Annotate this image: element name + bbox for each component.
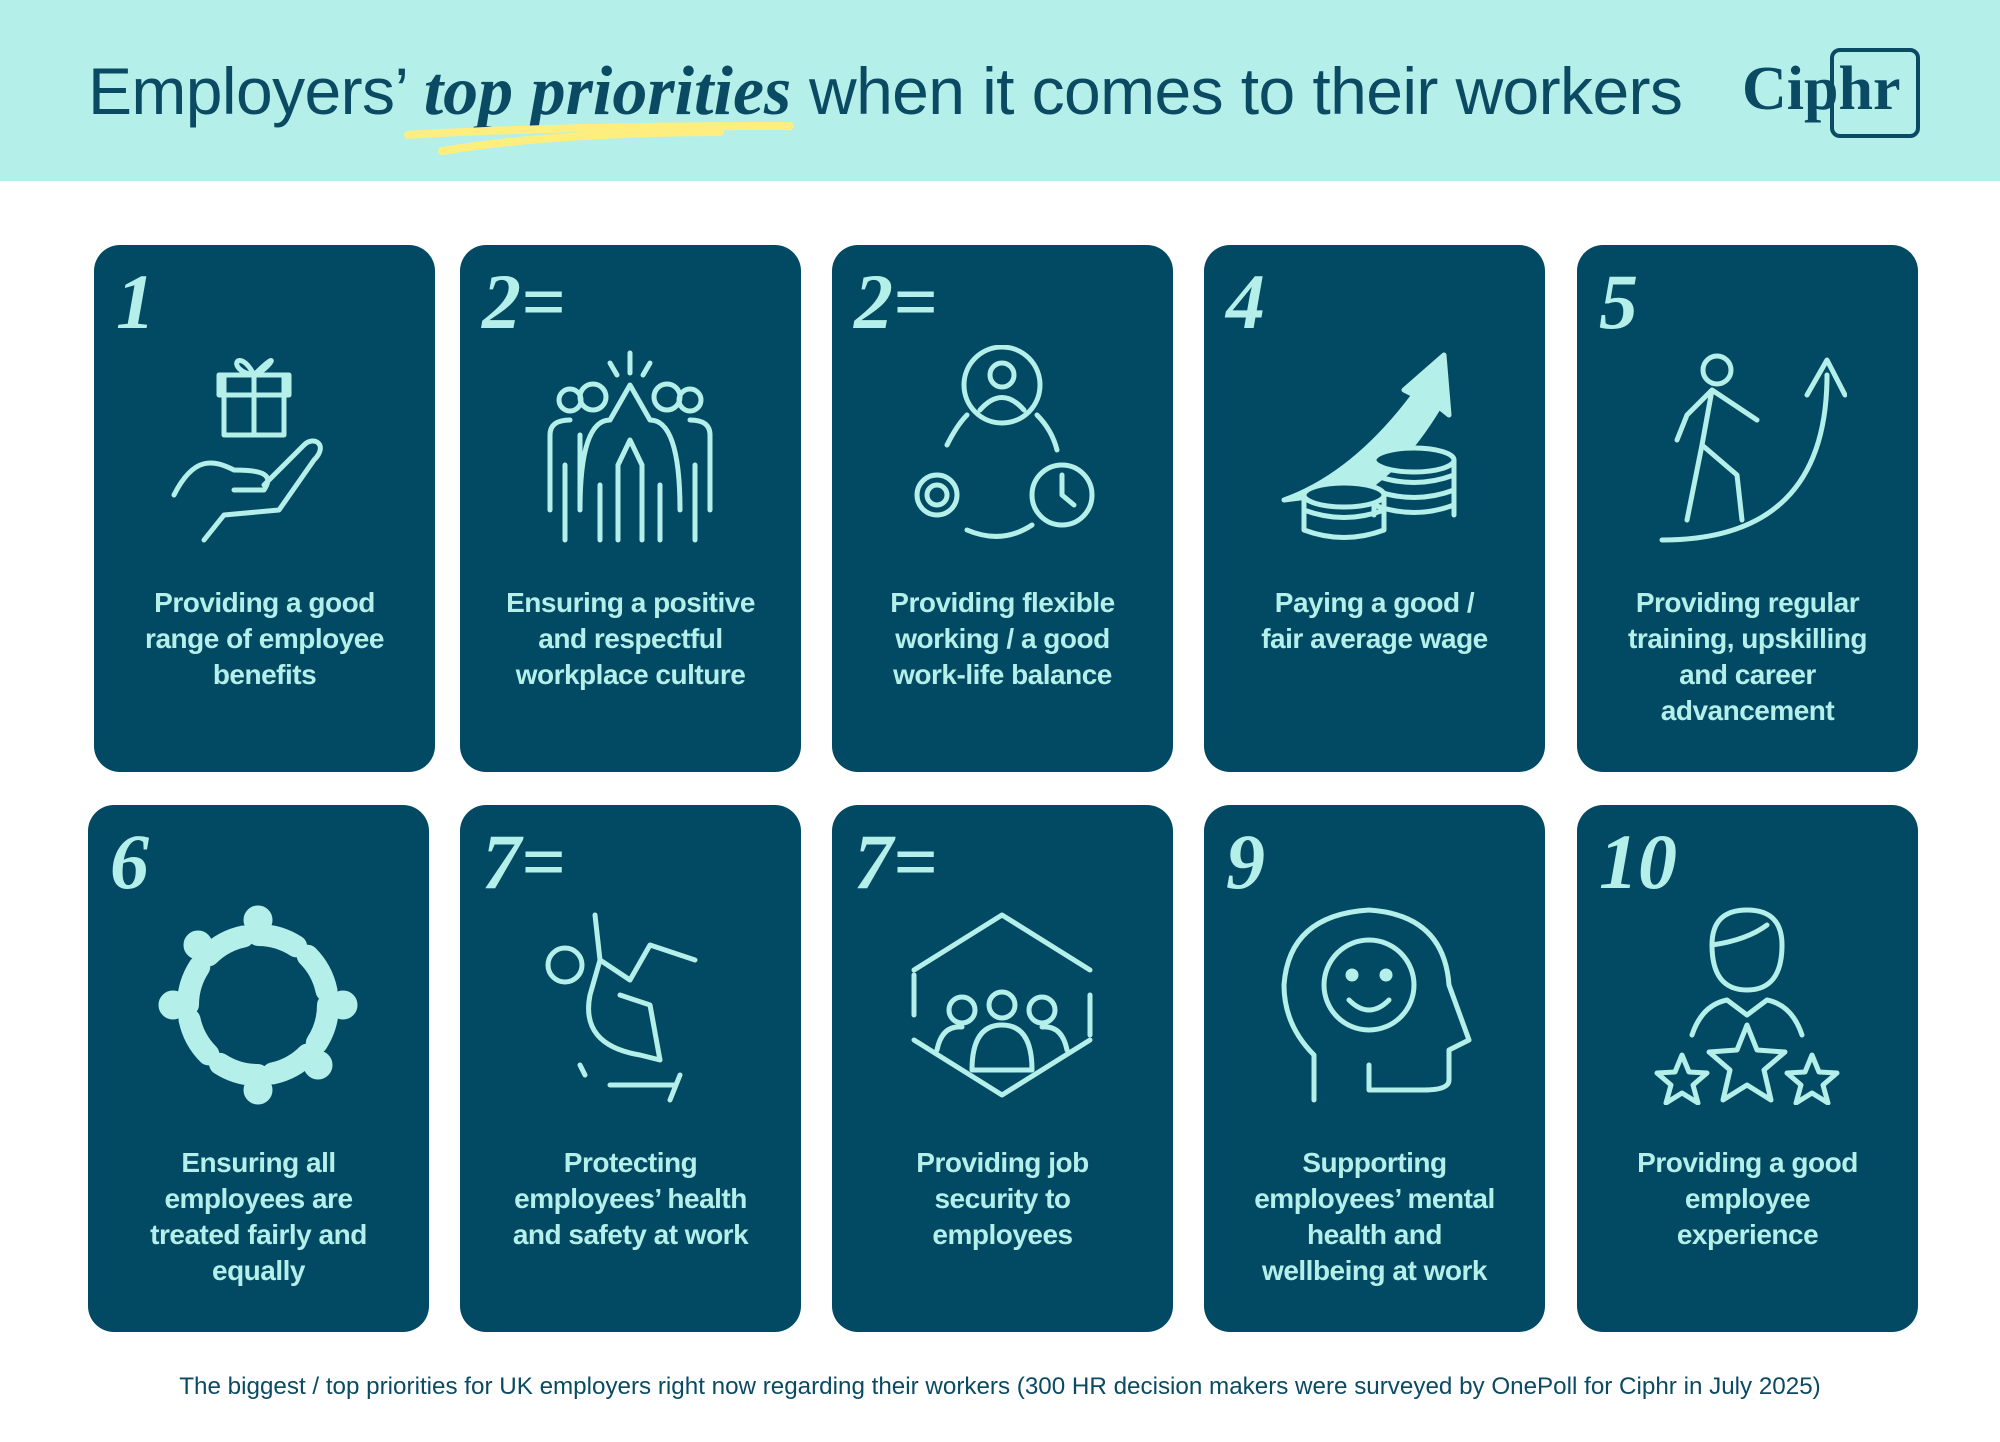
card 4: Paying a good / [1275, 587, 1474, 618]
card 5: and career [1679, 659, 1816, 690]
card 2: 2= [482, 258, 565, 345]
card 5: 5 [1599, 258, 1638, 345]
card 10: 10 [1599, 818, 1677, 905]
title: Employers’ top priorities when it comes to their workers [88, 53, 1682, 130]
card 8: employees [932, 1219, 1073, 1250]
card 6: 6 [110, 818, 149, 905]
icon: head with smile [1282, 908, 1472, 1102]
card 7 [460, 805, 801, 1332]
card 3: work-life balance [893, 659, 1112, 690]
card 5: training, upskilling [1628, 623, 1867, 654]
card 9 [1204, 805, 1545, 1332]
card 6 [88, 805, 429, 1332]
card 3: 2= [854, 258, 937, 345]
card 5: advancement [1661, 695, 1834, 726]
header band [0, 0, 2000, 181]
card 3: Providing flexible [890, 587, 1115, 618]
card 8 [832, 805, 1173, 1332]
card 9: 9 [1226, 818, 1265, 905]
card 7: Protecting [564, 1147, 697, 1178]
icon: coins and arrow [1282, 352, 1456, 540]
card 5 [1577, 245, 1918, 772]
card 1: Providing a good [154, 587, 375, 618]
card 3 [832, 245, 1173, 772]
icon: gift in hand [172, 358, 323, 542]
card 6: treated fairly and [150, 1219, 367, 1250]
card 9: Supporting [1302, 1147, 1447, 1178]
card 10: Providing a good [1637, 1147, 1858, 1178]
card 2: and respectful [538, 623, 723, 654]
icon: team high five [548, 350, 712, 542]
card 3: working / a good [895, 623, 1110, 654]
card 9: health and [1307, 1219, 1442, 1250]
card 4: 4 [1226, 258, 1265, 345]
card 1: 1 [116, 258, 155, 345]
icon: person falling [546, 912, 698, 1102]
card 1 [94, 245, 435, 772]
card 9: wellbeing at work [1262, 1255, 1487, 1286]
card 7: employees’ health [514, 1183, 747, 1214]
card 2: workplace culture [516, 659, 745, 690]
icon: circle of people [158, 906, 358, 1104]
card 10: employee [1685, 1183, 1810, 1214]
card 1: range of employee [145, 623, 384, 654]
card 8: Providing job [916, 1147, 1089, 1178]
card 10 [1577, 805, 1918, 1332]
card 4 [1204, 245, 1545, 772]
card 10: experience [1677, 1219, 1818, 1250]
card 6: employees are [164, 1183, 353, 1214]
card 8: 7= [854, 818, 937, 905]
icon: hexagon of people [912, 912, 1092, 1098]
card 5: Providing regular [1636, 587, 1859, 618]
footer note: The biggest / top priorities for UK employers right now regarding their workers (300 HR decision makers were surveyed by OnePoll for Ciphr in July 2025) [179, 1373, 1821, 1400]
card 7: 7= [482, 818, 565, 905]
card 4: fair average wage [1261, 623, 1488, 654]
icon: person climbing arrow [1660, 354, 1847, 542]
card 8: security to [934, 1183, 1071, 1214]
logo [1742, 48, 1920, 138]
icon: person with stars [1654, 908, 1840, 1105]
card 6: Ensuring all [181, 1147, 336, 1178]
card 9: employees’ mental [1254, 1183, 1495, 1214]
logo: Ciphr [1742, 55, 1900, 123]
icon: person, gear, clock cycle [914, 345, 1094, 539]
highlight underline [404, 122, 794, 155]
card 7: and safety at work [513, 1219, 748, 1250]
card 1: benefits [213, 659, 316, 690]
card 6: equally [212, 1255, 305, 1286]
card 2: Ensuring a positive [506, 587, 755, 618]
card 2 [460, 245, 801, 772]
